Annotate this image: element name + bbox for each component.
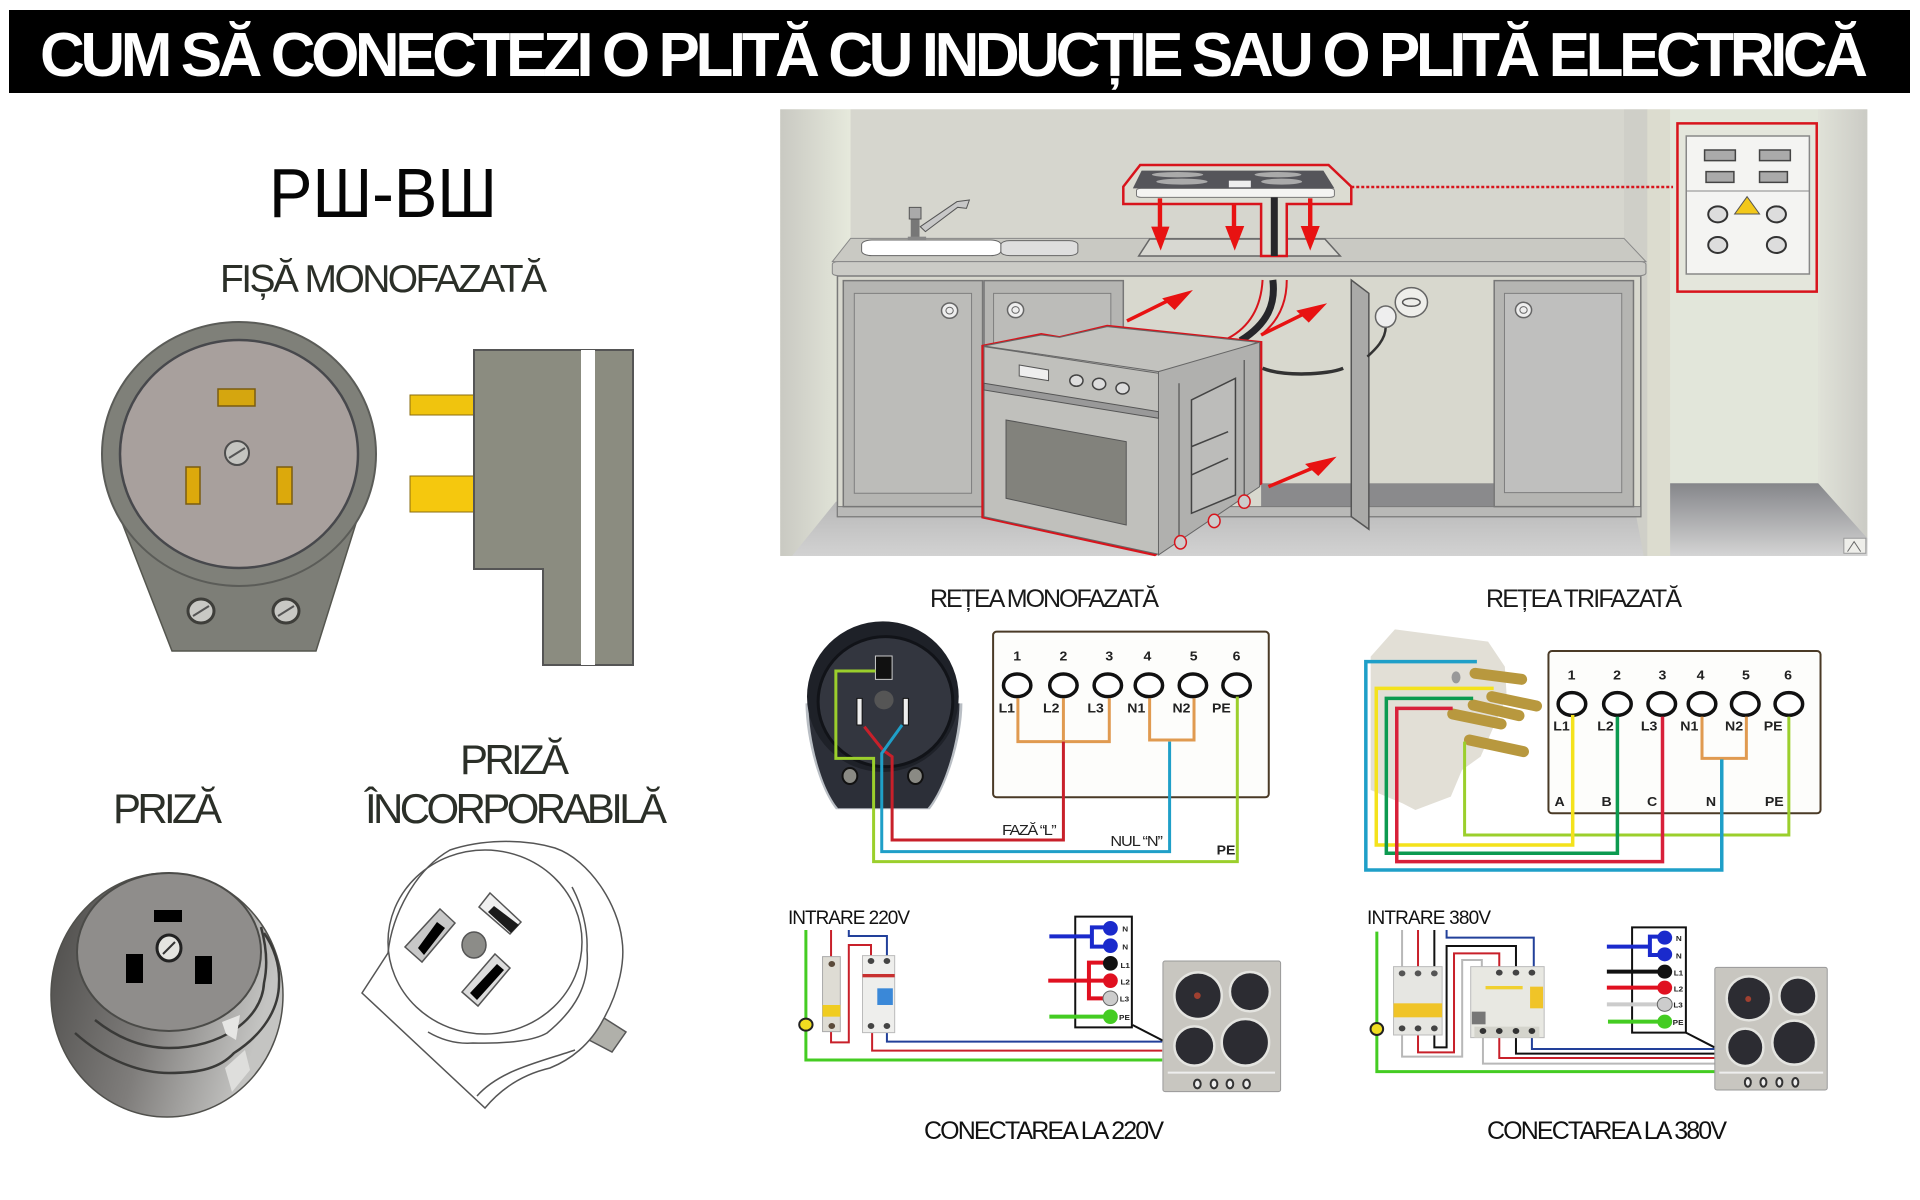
terminal labels: L1 (999, 701, 1016, 715)
walls (780, 109, 1867, 556)
line labels (1555, 795, 1784, 809)
terminal numbers: 4 (1143, 649, 1152, 663)
heading: built-in socket (364, 736, 667, 832)
triple breaker (1394, 967, 1442, 1035)
heading: single-phase network: REȚEA MONOFAZATĂ (930, 584, 1159, 613)
heading: 220V input: INTRARE 220V (788, 908, 910, 929)
wire labels: NUL “N” (1110, 834, 1163, 850)
green wire (1386, 698, 1617, 853)
red phase wire (864, 727, 1063, 840)
terminal labels: N2 (1172, 701, 1190, 715)
terminal labels: N2 (1725, 719, 1743, 733)
terminal box (993, 632, 1269, 797)
terminal numbers (1013, 649, 1240, 663)
terminal block: L2 (1120, 978, 1130, 987)
beige plug (1371, 629, 1537, 810)
circuit breaker (823, 957, 840, 1032)
earth symbol (799, 1019, 813, 1031)
terminal block (1048, 917, 1132, 1027)
icon: plug front view (102, 322, 376, 651)
terminal numbers: 6 (1784, 668, 1792, 682)
terminal numbers: 2 (1059, 649, 1067, 663)
terminal labels: PE (1764, 719, 1783, 733)
terminal numbers: 5 (1190, 649, 1198, 663)
black plug (806, 621, 962, 809)
red wire (1397, 708, 1663, 862)
panel: distribution board (1677, 123, 1817, 292)
title banner: CUM SĂ CONECTEZI O PLITĂ CU INDUCȚIE SAU O PLITĂ ELECTRICĂ (40, 21, 1868, 90)
line labels: N (1706, 795, 1716, 809)
panel: 220V connection diagram (799, 917, 1281, 1092)
blue wire (1366, 662, 1722, 870)
terminal numbers: 4 (1697, 668, 1705, 682)
heading: plug type: PШ-BШ (269, 154, 497, 232)
terminal labels (999, 701, 1231, 715)
floor (792, 483, 1867, 556)
line labels: C (1647, 795, 1657, 809)
wires (806, 930, 1163, 1060)
terminal box (1548, 651, 1821, 813)
hob (1715, 967, 1827, 1090)
terminal numbers: 1 (1568, 668, 1576, 682)
sink and faucet (862, 200, 1078, 256)
arrows: diagonal (1127, 290, 1337, 487)
terminal block: L2 (1674, 985, 1683, 994)
terminal block (1607, 927, 1686, 1033)
caption: 380V connection: CONECTAREA LA 380V (1487, 1117, 1727, 1145)
terminal block: L1 (1674, 969, 1684, 978)
terminal labels: L2 (1597, 719, 1614, 733)
heading: 380V input: INTRARE 380V (1367, 908, 1491, 929)
terminal block: N (1676, 952, 1682, 960)
terminal numbers: 2 (1613, 668, 1621, 682)
terminal block: L3 (1673, 1001, 1684, 1010)
orange bridges (1018, 698, 1194, 742)
icon: plug side view (410, 350, 633, 665)
power cable (1241, 197, 1274, 341)
terminal labels: N1 (1680, 719, 1699, 733)
hob with red outline (1123, 165, 1351, 256)
heading: built-in socket: ÎNCORPORABILĂ (364, 785, 667, 832)
lower cabinet (837, 276, 1641, 529)
terminal block: PE (1673, 1018, 1684, 1027)
orange neutral bridge (1702, 717, 1746, 758)
terminal labels: L3 (1641, 719, 1657, 733)
residual current device (862, 956, 895, 1033)
terminals (1558, 693, 1803, 715)
terminal numbers (1568, 668, 1792, 682)
hob (1163, 961, 1281, 1092)
terminal numbers: 5 (1742, 668, 1750, 682)
icon: built-in socket outline (362, 841, 626, 1108)
panel: single-phase wiring diagram (806, 621, 1269, 862)
wall socket and plug (1263, 288, 1428, 374)
terminal numbers: 1 (1013, 649, 1022, 663)
terminal labels: N1 (1127, 701, 1146, 715)
earth symbol (1371, 1023, 1383, 1035)
wire labels (1002, 823, 1235, 857)
terminal numbers: 3 (1105, 649, 1113, 663)
wires (1377, 930, 1714, 1072)
red outlines along cable (1228, 280, 1287, 338)
panel: kitchen illustration (780, 109, 1867, 556)
terminal labels: L3 (1087, 701, 1104, 715)
terminal labels (1553, 719, 1783, 733)
heading: built-in socket: PRIZĂ (460, 736, 569, 783)
terminal block: L3 (1120, 995, 1130, 1003)
terminal block: PE (1119, 1013, 1130, 1022)
terminal labels: L2 (1043, 701, 1059, 715)
icon: surface socket (51, 873, 283, 1117)
caption: 220V connection: CONECTAREA LA 220V (924, 1117, 1164, 1145)
terminal labels: PE (1212, 701, 1231, 715)
wire labels: FAZĂ “L” (1002, 823, 1057, 839)
terminal block: N (1676, 934, 1682, 943)
corner mark (1844, 538, 1866, 553)
terminal labels: L1 (1553, 719, 1570, 733)
oven with red outline (983, 326, 1261, 555)
countertop (832, 238, 1646, 276)
arrows: down to counter (1151, 198, 1320, 251)
cooktop opening (1139, 239, 1340, 256)
terminal block: L1 (1120, 961, 1131, 970)
line labels: A (1555, 795, 1565, 809)
green earth wire (836, 671, 1237, 862)
panel: 380V connection diagram (1371, 927, 1827, 1090)
terminal numbers: 6 (1233, 649, 1240, 663)
heading: socket: PRIZĂ (113, 785, 222, 832)
line labels: B (1601, 795, 1612, 809)
terminal block: N (1122, 943, 1129, 951)
terminal numbers: 3 (1659, 668, 1666, 682)
heading: single phase plug: FIȘĂ MONOFAZATĂ (220, 258, 547, 301)
wire labels: PE (1217, 843, 1235, 857)
terminal block: N (1122, 925, 1129, 933)
dotted connector (1351, 186, 1673, 188)
line labels: PE (1765, 795, 1784, 809)
light green earth wire (1465, 717, 1789, 835)
heading: three-phase network: REȚEA TRIFAZATĂ (1486, 584, 1682, 613)
blue neutral wire (882, 725, 1170, 852)
residual current device (1471, 967, 1544, 1038)
terminals (1003, 674, 1250, 697)
yellow wire (1376, 688, 1573, 845)
panel: three-phase wiring diagram (1366, 629, 1821, 870)
